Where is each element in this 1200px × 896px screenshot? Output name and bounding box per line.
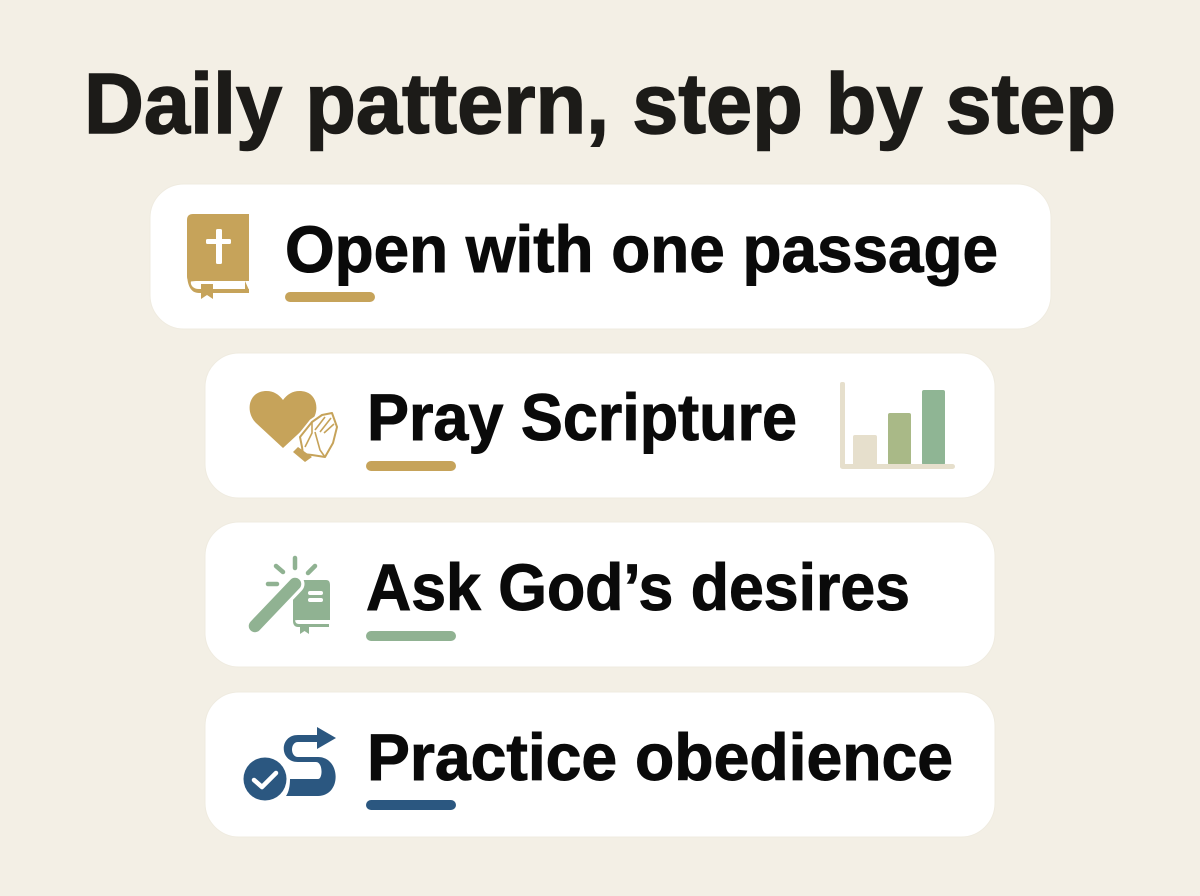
heading: open with one passage: Open with one passage [285, 212, 998, 286]
icon: bible with cross [187, 214, 249, 299]
underline: navy [366, 800, 456, 810]
panel: step 3 ask god's desires [205, 522, 995, 667]
icon: path with check [244, 727, 336, 800]
heading: ask god's desires: Ask God’s desires [366, 550, 910, 624]
underline: gold [366, 461, 456, 471]
icon: wand and book [255, 558, 330, 634]
panel: step 4 practice obedience [205, 692, 995, 837]
heading: practice obedience: Practice obedience [367, 720, 953, 794]
title: Daily pattern, step by step [84, 57, 1116, 152]
icon: heart and praying hands [250, 391, 337, 462]
panel: step 2 pray scripture [205, 353, 995, 498]
underline: green [366, 631, 456, 641]
panel: step 1 open with one passage [150, 184, 1051, 329]
bar chart [840, 382, 955, 469]
underline: gold [285, 292, 375, 302]
heading: pray scripture: Pray Scripture [367, 380, 797, 454]
